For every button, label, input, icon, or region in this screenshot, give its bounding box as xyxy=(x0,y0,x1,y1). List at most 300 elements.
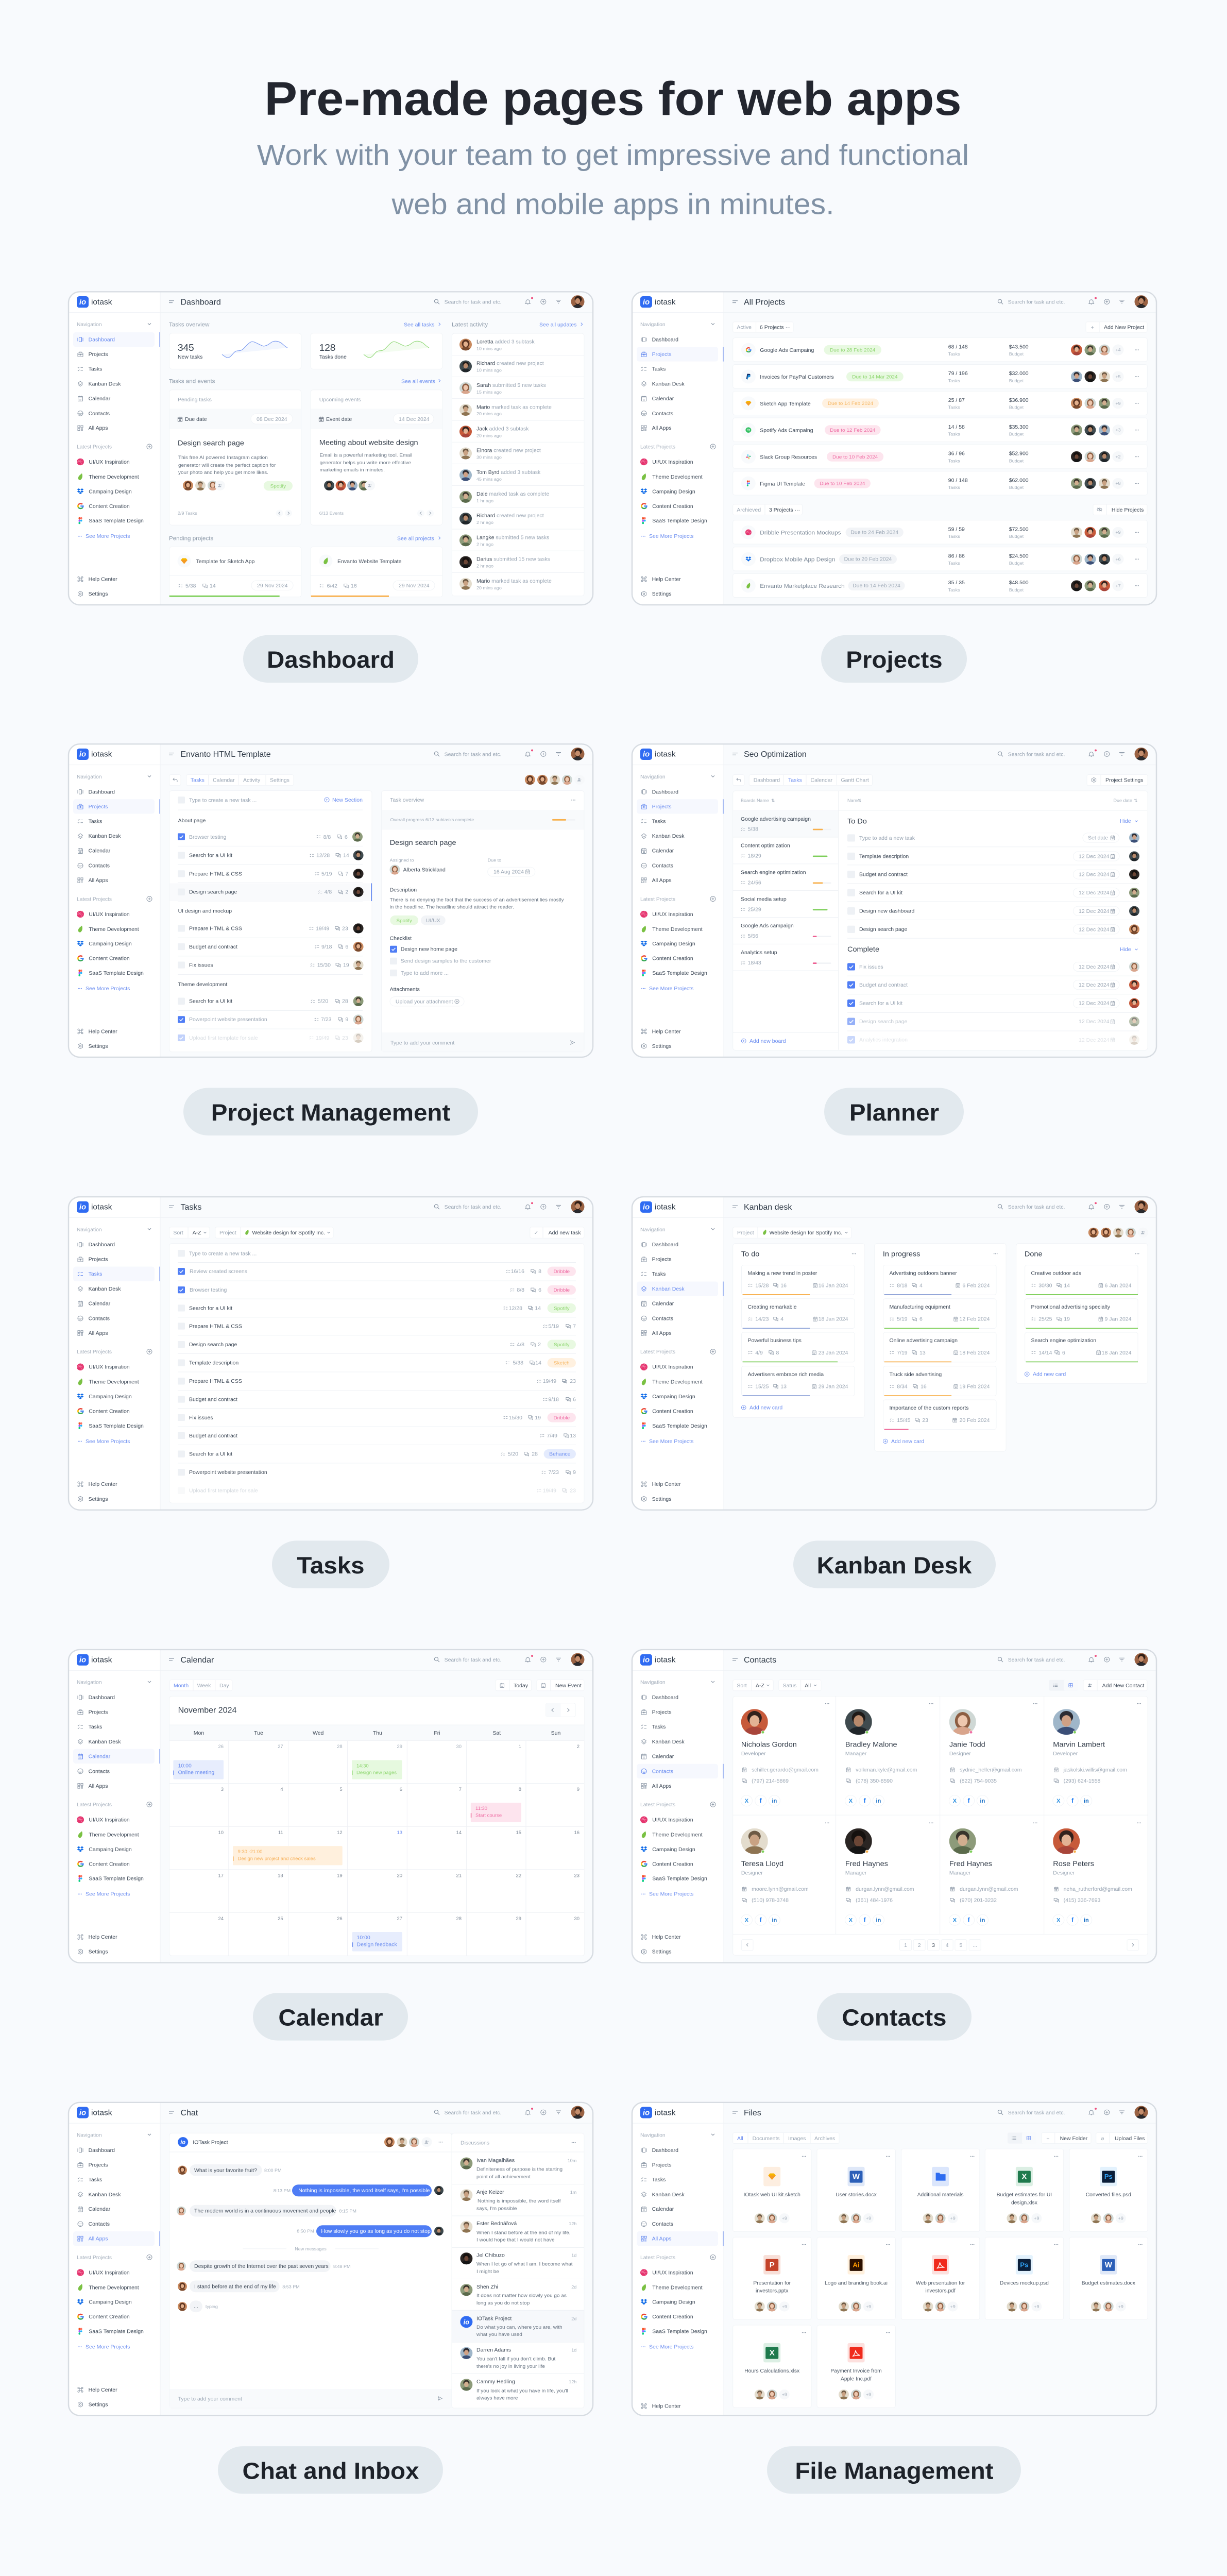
card: Advertisers embrace rich media: Advertisers embrace rich media xyxy=(748,1372,824,1378)
complete list: Fix issues xyxy=(859,964,883,970)
project row: Figma UI Template: Due to 10 Feb 2024 xyxy=(820,481,865,487)
project row: Slack Group Resources: +2 xyxy=(1115,454,1121,459)
file: User stories.docx: User stories.docx xyxy=(836,2192,877,2198)
file: Payment Invoice from Apple Inc.pdf xyxy=(817,2325,895,2408)
card: pending task: Due date xyxy=(185,417,207,422)
contact: Marvin Lambert: jaskolski.willis@gmail.com xyxy=(1063,1767,1127,1773)
card: Manufacturing equipment: Manufacturing equipment xyxy=(890,1304,950,1310)
sidebar: iotask xyxy=(91,298,112,307)
panel: Contacts screen xyxy=(632,1650,1156,1963)
task table: 5/19 xyxy=(549,1324,559,1329)
project card: envanto xyxy=(311,547,442,597)
messages: 8:15 PM xyxy=(339,2209,356,2213)
section: UI design and mockup: Fix issues xyxy=(189,963,213,968)
task table: Spotify xyxy=(554,1306,570,1311)
card: Advertising outdoors banner: 6 Feb 2024 xyxy=(962,1283,990,1289)
task list panel: Type to create a new task ... xyxy=(189,798,257,804)
sidebar: iotask xyxy=(655,750,676,759)
file tabs and actions: Documents xyxy=(753,2136,780,2142)
top bar: All Projects xyxy=(744,298,785,307)
label: Projects xyxy=(821,635,967,683)
sidebar: iotask xyxy=(91,750,112,759)
weekday labels: Sun xyxy=(551,1731,561,1736)
top bar xyxy=(632,295,1156,313)
section: Theme development: 28 xyxy=(342,999,348,1005)
sidebar: Content Creation xyxy=(652,504,693,510)
task table: 28 xyxy=(532,1452,538,1457)
sidebar: iotask xyxy=(655,1203,676,1212)
sidebar: Tasks xyxy=(89,1724,102,1730)
project row: Google Ads Campaing: 68 / 148 xyxy=(948,345,968,350)
complete list: Complete xyxy=(847,945,879,954)
contact: Fred Haynes (second) xyxy=(949,1822,1037,1925)
event: Design new pages: Design new pages xyxy=(356,1770,397,1775)
sidebar: Theme Development xyxy=(652,1380,703,1385)
sidebar: Dashboard xyxy=(89,1242,115,1248)
tabs: Project Settings xyxy=(1105,777,1144,783)
sidebar: See More Projects xyxy=(649,1892,693,1897)
card: Powerful business tips: 4/9 xyxy=(755,1350,763,1356)
card: Creating remarkable: 14/23 xyxy=(755,1317,769,1322)
file: Hours Calculations.xlsx xyxy=(733,2325,811,2408)
card: Search engine optimization: 14/14 xyxy=(1038,1350,1052,1356)
contact: Nicholas Gordon: in xyxy=(772,1798,777,1804)
project card: sketch: 14 xyxy=(210,584,216,589)
to do list: Design search page xyxy=(859,927,908,933)
task overview panel: Upload your attachment xyxy=(396,999,453,1005)
section: About page: Search for a UI kit xyxy=(189,853,232,858)
card: Powerful business tips: 23 Jan 2024 xyxy=(819,1350,848,1356)
project row: Google Ads Campaing: Budget xyxy=(1009,351,1024,357)
card: upcoming event: 14 Dec 2024 xyxy=(399,417,430,422)
sidebar xyxy=(69,1197,160,1510)
messages: What is your favorite fruit? xyxy=(194,2168,257,2174)
filters and actions: Satus xyxy=(783,1683,796,1689)
conversation panel: io xyxy=(180,2140,185,2145)
complete list xyxy=(847,945,1139,1047)
card: Advertisers embrace rich media: 13 xyxy=(780,1384,787,1389)
section: Theme development: 7/23 xyxy=(321,1017,332,1023)
sidebar: Tasks xyxy=(89,2177,102,2183)
event: Design new project and check sales: Design new project and check sales xyxy=(238,1856,316,1861)
task table: 12/28 xyxy=(509,1306,522,1311)
card: Importance of the custom reports xyxy=(883,1400,996,1430)
sidebar: Content Creation xyxy=(89,1409,130,1414)
section: Theme development: 23 xyxy=(342,1036,348,1041)
column: To do xyxy=(733,1243,865,1417)
project filter and team: Project xyxy=(737,1230,754,1236)
active projects header xyxy=(733,322,1147,332)
messages: The modern world is in a continuous movement and people xyxy=(194,2209,336,2214)
sidebar: Calendar xyxy=(652,2207,674,2212)
sidebar: Tasks xyxy=(652,1272,666,1277)
section: UI design and mockup: Prepare HTML & CSS xyxy=(189,926,242,931)
sidebar: Theme Development xyxy=(89,2285,139,2291)
sidebar: Help Center xyxy=(652,1029,681,1035)
to do list: Type to add a new task xyxy=(859,836,915,841)
card: Search engine optimization xyxy=(1025,1332,1138,1362)
sidebar: Campaing Design xyxy=(652,941,695,947)
contact: Nicholas Gordon: (797) 214-5869 xyxy=(752,1778,789,1784)
sidebar: All Apps xyxy=(652,1331,672,1336)
day numbers: 8 xyxy=(519,1787,521,1792)
pagination xyxy=(742,1939,1138,1951)
task overview panel: Send design samples to the customer xyxy=(401,959,491,964)
contact: Marvin Lambert: f xyxy=(1071,1798,1073,1804)
event: Start course: 11:30 xyxy=(475,1806,487,1811)
project row: Spotify Ads Campaing: +3 xyxy=(1115,428,1121,433)
label: Projects: Projects xyxy=(846,647,943,673)
latest activity panel: Loretta added 3 subtask xyxy=(476,340,535,345)
file: Additional materials xyxy=(901,2149,980,2232)
task table: 6 xyxy=(538,1287,541,1293)
label: Planner: Planner xyxy=(849,1099,939,1126)
contact: Fred Haynes (manager): in xyxy=(876,1918,881,1924)
sidebar: SaaS Template Design xyxy=(89,2329,144,2334)
column: In progress xyxy=(875,1243,1006,1451)
section: About page: Prepare HTML & CSS xyxy=(189,872,242,877)
weekday labels: Tue xyxy=(254,1731,263,1736)
contact: Nicholas Gordon: Developer xyxy=(741,1751,766,1757)
subtitle: Work with your team to get impressive and functional xyxy=(257,139,969,172)
project row: Invoices for PayPal Customers xyxy=(733,365,1147,388)
project row: Dribble Presentation Mockups: Tasks xyxy=(948,534,960,539)
day numbers: 4 xyxy=(280,1787,283,1792)
day numbers: 6 xyxy=(400,1787,402,1792)
contact: Marvin Lambert: in xyxy=(1084,1798,1089,1804)
boards list: Add new board xyxy=(749,1039,786,1044)
sidebar: Content Creation xyxy=(652,1409,693,1414)
discussions panel: IOTask Project xyxy=(476,2316,512,2321)
filters and actions: Add New Contact xyxy=(1102,1683,1144,1689)
task table: 19/49 xyxy=(543,1488,556,1494)
sidebar: io xyxy=(79,751,86,759)
view tabs and buttons: Month xyxy=(174,1683,189,1689)
section: Theme development: Powerpoint website presentation xyxy=(189,1017,267,1023)
filters: A-Z xyxy=(193,1230,201,1236)
contact: Fred Haynes (manager): (361) 484-1976 xyxy=(856,1898,893,1903)
sidebar: Campaing Design xyxy=(89,1394,132,1400)
project row: Sketch App Template: Due to 14 Feb 2024 xyxy=(828,401,874,406)
contact: Fred Haynes (second): Fred Haynes xyxy=(949,1860,992,1868)
project row: Envanto Marketplace Research: Due to 14 Feb 2024 xyxy=(853,583,900,589)
project row: Spotify Ads Campaing: $35.300 xyxy=(1009,425,1029,430)
contact: Janie Todd xyxy=(949,1703,1037,1806)
contact: Fred Haynes (manager): f xyxy=(864,1917,866,1924)
boards list xyxy=(733,791,1148,1050)
project row: Google Ads Campaing: Tasks xyxy=(948,351,960,357)
column: In progress: In progress xyxy=(883,1250,920,1258)
sidebar: iotask xyxy=(91,2109,112,2117)
file: Converted files.psd: Converted files.psd xyxy=(1086,2192,1131,2198)
contact: Fred Haynes (manager): Fred Haynes xyxy=(845,1860,888,1868)
panel: Projects screen xyxy=(632,292,1156,605)
card: pending task: 08 Dec 2024 xyxy=(257,417,287,422)
complete list: 12 Dec 2024 xyxy=(1079,982,1110,988)
discussions panel: Ivan Magalhães xyxy=(476,2158,515,2164)
panel: Calendar screen xyxy=(69,1650,593,1963)
to do list: ⇅ xyxy=(858,798,862,803)
column: In progress: Add new card xyxy=(891,1439,924,1445)
file: Budget estimates.docx xyxy=(1069,2237,1148,2319)
card: pending task: 2/9 Tasks xyxy=(178,511,197,516)
task overview panel: Task overview xyxy=(390,798,424,803)
sidebar: UI/UX Inspiration xyxy=(652,1365,693,1370)
sidebar: UI/UX Inspiration xyxy=(652,2270,693,2276)
label: Contacts: Contacts xyxy=(842,2005,947,2031)
task overview panel: in the headline. The headline should attract the reader. xyxy=(390,905,514,910)
sidebar: SaaS Template Design xyxy=(89,971,144,976)
project row: Slack Group Resources: $52.900 xyxy=(1009,451,1029,457)
card: Promotional advertising specialty xyxy=(1025,1299,1138,1329)
card: Powerful business tips xyxy=(742,1332,855,1362)
task table: 13 xyxy=(570,1433,576,1439)
complete list: 12 Dec 2024 xyxy=(1079,1019,1110,1025)
contact: Rose Peters: Rose Peters xyxy=(1053,1860,1094,1868)
contacts grid xyxy=(733,1696,1148,1955)
tabs: Gantt Chart xyxy=(841,777,869,783)
archived projects header xyxy=(733,504,1147,515)
discussions panel: Darren Adams xyxy=(476,2348,511,2353)
task table: Powerpoint website presentation xyxy=(189,1470,267,1476)
project filter and team xyxy=(733,1227,1148,1240)
sidebar xyxy=(632,1650,724,1963)
sidebar: io xyxy=(643,751,650,759)
event: Online meeting xyxy=(173,1760,224,1780)
pagination: 3 xyxy=(932,1943,935,1948)
sidebar: Help Center xyxy=(89,1482,117,1487)
subtitle: web and mobile apps in minutes. xyxy=(391,188,834,221)
section: About page: 14 xyxy=(343,853,349,858)
latest activity panel: 20 mins ago xyxy=(476,433,502,438)
card: Online advertising campaign: 7/19 xyxy=(897,1350,908,1356)
card: upcoming event: generator helps you write more effective xyxy=(319,460,412,466)
label: Dashboard: Dashboard xyxy=(267,647,395,673)
sidebar: UI/UX Inspiration xyxy=(89,1365,130,1370)
contact: Fred Haynes (second): f xyxy=(968,1917,970,1924)
top bar: Search for task and etc. xyxy=(445,752,501,757)
card: Importance of the custom reports: 15/45 xyxy=(897,1418,911,1423)
latest activity panel: 10 mins ago xyxy=(476,368,502,373)
card: Search engine optimization: Search engine optimization xyxy=(1031,1338,1096,1344)
sidebar: Help Center xyxy=(652,1482,681,1487)
pagination: 2 xyxy=(918,1943,921,1948)
sidebar: See More Projects xyxy=(86,1439,130,1445)
sidebar: Campaing Design xyxy=(652,489,695,495)
project row: Spotify Ads Campaing: 14 / 58 xyxy=(948,425,965,430)
project card: envanto: Envanto Website Template xyxy=(337,559,402,565)
file: Hours Calculations.xlsx: +9 xyxy=(782,2392,787,2397)
sidebar: Tasks xyxy=(652,819,666,824)
messages: ... xyxy=(194,2304,198,2310)
day numbers: 28 xyxy=(456,1916,462,1921)
label: Chat and Inbox: Chat and Inbox xyxy=(243,2458,419,2484)
sidebar: Kanban Desk xyxy=(652,1286,685,1292)
contact: Marvin Lambert: (293) 624-1558 xyxy=(1064,1778,1101,1784)
task overview panel: There is no denying the fact that the success of an advertisement lies mostly xyxy=(390,897,564,903)
stat card: tasks done xyxy=(311,333,442,369)
top bar xyxy=(69,1200,593,1217)
contact: Marvin Lambert: Marvin Lambert xyxy=(1053,1741,1105,1749)
sidebar: Calendar xyxy=(652,1301,674,1307)
sidebar xyxy=(632,292,724,605)
sidebar: All Apps xyxy=(652,878,672,884)
project row: Slack Group Resources: 36 / 96 xyxy=(948,451,965,457)
card: Powerful business tips: 8 xyxy=(776,1350,779,1356)
latest activity panel: 20 mins ago xyxy=(476,585,502,590)
tabs xyxy=(733,775,1148,786)
sidebar: SaaS Template Design xyxy=(89,518,144,524)
sidebar: Content Creation xyxy=(89,2314,130,2320)
project row: Figma UI Template: Figma UI Template xyxy=(760,481,805,487)
task table: Design search page xyxy=(189,1342,237,1348)
latest activity panel: 30 mins ago xyxy=(476,455,502,460)
top bar: Kanban desk xyxy=(744,1203,792,1212)
complete list: Search for a UI kit xyxy=(859,1001,902,1006)
task overview panel: Attachments xyxy=(390,987,420,992)
filters: Sort xyxy=(173,1230,183,1236)
project row: Figma UI Template: +8 xyxy=(1115,481,1121,486)
filters: Project xyxy=(219,1230,236,1236)
discussions panel: Discussions xyxy=(461,2141,489,2146)
project row: Spotify Ads Campaing: Spotify Ads Campaing xyxy=(760,428,813,434)
contact: Nicholas Gordon: schiller.gerardo@gmail.com xyxy=(752,1767,819,1773)
task overview panel: Spotify xyxy=(396,918,412,924)
boards list: 25/29 xyxy=(748,907,761,912)
sidebar: Kanban Desk xyxy=(652,382,685,387)
task table: 14 xyxy=(535,1306,541,1311)
contact: Bradley Malone: in xyxy=(876,1798,881,1804)
sidebar: iotask xyxy=(655,2109,676,2117)
section: About page: Browser testing xyxy=(189,835,227,840)
sidebar: Help Center xyxy=(89,1935,117,1940)
contact: Rose Peters xyxy=(1053,1822,1141,1925)
sidebar: Navigation xyxy=(640,774,666,780)
day numbers: 29 xyxy=(516,1916,521,1921)
discussions panel: 1d xyxy=(571,2253,576,2258)
file: Budget estimates.docx: W xyxy=(1105,2261,1112,2269)
sidebar: Help Center xyxy=(652,577,681,582)
project row: Dropbox Mobile App Design: Tasks xyxy=(948,561,960,566)
contact: Teresa Lloyd: Designer xyxy=(741,1871,763,1876)
top bar: Contacts xyxy=(744,1656,776,1665)
contact: Teresa Lloyd: Teresa Lloyd xyxy=(741,1860,783,1868)
card: Online advertising campaign xyxy=(883,1332,996,1362)
sidebar: Latest Projects xyxy=(77,897,112,902)
file: Budget estimates.docx: Budget estimates.docx xyxy=(1082,2281,1135,2286)
card: pending task xyxy=(169,390,301,525)
latest activity panel: 15 mins ago xyxy=(476,389,502,395)
sidebar: All Apps xyxy=(89,1784,108,1789)
project row: Figma UI Template: $62.000 xyxy=(1009,478,1029,483)
contact: Fred Haynes (manager): X xyxy=(849,1918,853,1924)
file: Converted files.psd: +9 xyxy=(1118,2216,1123,2221)
top bar: Envanto HTML Template xyxy=(180,750,271,759)
card: Creative outdoor ads: 30/30 xyxy=(1038,1283,1052,1289)
sidebar xyxy=(632,744,724,1057)
task table: Sketch xyxy=(554,1361,570,1366)
top bar: Dashboard xyxy=(180,298,221,307)
project row: Google Ads Campaing: $43.500 xyxy=(1009,345,1029,350)
card: Online advertising campaign: 18 Feb 2024 xyxy=(960,1350,990,1356)
column: Done xyxy=(1016,1243,1148,1384)
project row: Sketch App Template xyxy=(733,391,1147,415)
sidebar: Campaing Design xyxy=(652,1394,695,1400)
file: Converted files.psd xyxy=(1069,2149,1148,2232)
contact: Rose Peters: in xyxy=(1084,1918,1089,1924)
day numbers: 3 xyxy=(221,1787,224,1792)
section: UI design and mockup: 9/18 xyxy=(321,944,332,950)
file: Budget estimates for UI design.xlsx: X xyxy=(1021,2173,1027,2181)
task table: Spotify xyxy=(554,1342,570,1348)
filters: Website design for Spotify Inc. xyxy=(252,1230,325,1236)
contact: Nicholas Gordon xyxy=(741,1703,829,1806)
project row: Spotify Ads Campaing: Budget xyxy=(1009,432,1024,437)
contact: Janie Todd: f xyxy=(968,1798,970,1804)
file: Additional materials: Additional materials xyxy=(917,2192,964,2198)
messages: 8:13 PM xyxy=(274,2188,291,2193)
messages: I stand before at the end of my life xyxy=(194,2284,276,2290)
sidebar: Contacts xyxy=(89,411,110,417)
panel: Project Management screen xyxy=(69,744,593,1057)
file: Additional materials: +9 xyxy=(950,2216,956,2221)
column: Done: Done xyxy=(1025,1250,1043,1258)
sidebar: See More Projects xyxy=(86,534,130,539)
day numbers: 24 xyxy=(218,1916,224,1921)
top bar xyxy=(632,1200,1156,1217)
contact: Janie Todd: (822) 754-9035 xyxy=(960,1778,997,1784)
file: Logo and branding book.ai: +9 xyxy=(866,2304,871,2309)
sidebar: Projects xyxy=(89,2163,108,2168)
card: Promotional advertising specialty: 19 xyxy=(1064,1317,1070,1322)
section: UI design and mockup xyxy=(178,909,364,972)
complete list: Hide xyxy=(1120,947,1131,953)
task overview panel: Design new home page xyxy=(401,947,457,953)
file: Payment Invoice from Apple Inc.pdf: Payment Invoice from xyxy=(830,2368,882,2374)
project row: Sketch App Template: Budget xyxy=(1009,405,1024,410)
card: Making a new trend in poster: 16 Jan 2024 xyxy=(819,1283,848,1289)
task table: Budget and contract xyxy=(189,1433,237,1439)
project row: Invoices for PayPal Customers: +5 xyxy=(1115,374,1121,379)
to do list: Hide xyxy=(1120,819,1131,824)
sidebar: UI/UX Inspiration xyxy=(652,460,693,465)
file tabs and actions: All xyxy=(737,2136,743,2142)
latest activity panel: 1 hr ago xyxy=(476,498,493,503)
project row: Dropbox Mobile App Design: Dropbox Mobile App Design xyxy=(760,557,835,563)
boards list: Social media setup xyxy=(741,896,787,902)
sidebar: Contacts xyxy=(89,863,110,869)
task table: Template description xyxy=(189,1361,239,1366)
task table: 15/30 xyxy=(509,1415,522,1421)
view tabs and buttons xyxy=(169,1680,584,1691)
conversation panel: IOTask Project xyxy=(193,2140,228,2145)
sidebar: See More Projects xyxy=(649,986,693,992)
sidebar: Kanban Desk xyxy=(89,2192,121,2198)
boards list: Content optimization xyxy=(741,843,790,849)
file: Devices mockup.psd: Devices mockup.psd xyxy=(1000,2281,1049,2286)
sidebar: See More Projects xyxy=(649,1439,693,1445)
card: Creating remarkable: 4 xyxy=(780,1317,783,1322)
contact: Teresa Lloyd: f xyxy=(760,1917,762,1924)
sidebar: Theme Development xyxy=(652,2285,703,2291)
sidebar: SaaS Template Design xyxy=(89,1876,144,1882)
messages: Despite growth of the Internet over the past seven years xyxy=(194,2264,329,2269)
task table: 7/49 xyxy=(547,1433,557,1439)
label: Tasks: Tasks xyxy=(297,1552,365,1579)
tabs and team xyxy=(169,775,585,787)
sidebar: Projects xyxy=(652,1257,672,1263)
to do list: To Do xyxy=(847,818,867,825)
